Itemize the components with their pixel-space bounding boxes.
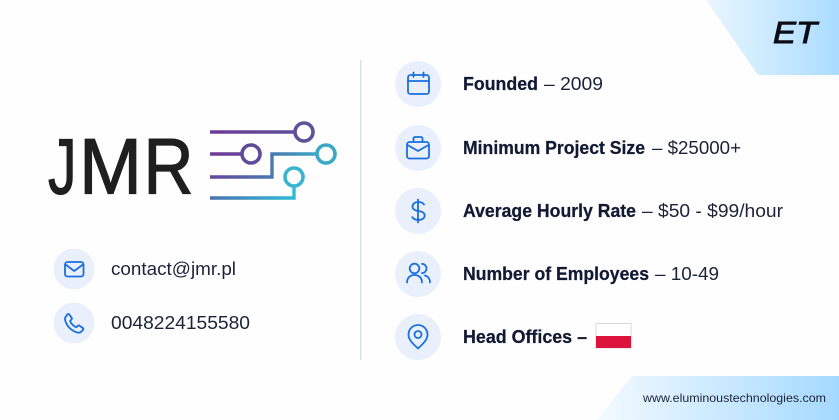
- logo wordmark: R: [144, 122, 194, 210]
- icon: calendar: [395, 61, 441, 107]
- minimum project size text: Minimum Project Size: [463, 138, 645, 158]
- top-right corner accent: [706, 0, 839, 75]
- icon: people: [395, 251, 441, 297]
- average hourly rate text: – $50 - $99/hour: [642, 201, 783, 221]
- phone number: 0048224155580: [111, 313, 250, 333]
- row: head offices: [395, 314, 631, 360]
- minimum project size text: – $25000+: [652, 138, 741, 158]
- average hourly rate text: Average Hourly Rate: [463, 201, 636, 221]
- row: number of employees: [395, 251, 719, 297]
- icon: phone: [54, 302, 94, 344]
- bottom-right website banner: [597, 376, 839, 420]
- logo circuit lines: [210, 123, 335, 198]
- icon: Polish flag: [596, 324, 631, 348]
- founded text: – 2009: [544, 74, 603, 94]
- email address: contact@jmr.pl: [111, 259, 236, 279]
- number of employees text: – 10-49: [655, 264, 719, 284]
- logo wordmark: J: [48, 122, 76, 210]
- contact: email: [54, 248, 236, 290]
- JMR company logo: [48, 122, 335, 210]
- number of employees text: Number of Employees: [463, 264, 649, 284]
- icon: envelope: [54, 248, 94, 290]
- icon: dollar sign: [395, 188, 441, 234]
- head offices text: Head Offices –: [463, 327, 587, 347]
- website address: www.eluminoustechnologies.com: [642, 391, 826, 405]
- row: average hourly rate: [395, 188, 783, 234]
- icon: briefcase: [395, 125, 441, 171]
- contact: phone: [54, 302, 250, 344]
- row: minimum project size: [395, 125, 741, 171]
- row: founded: [395, 61, 603, 107]
- logo wordmark: M: [79, 122, 142, 210]
- icon: location pin: [395, 314, 441, 360]
- founded text: Founded: [463, 74, 538, 94]
- brand logo: ET: ET: [773, 15, 819, 50]
